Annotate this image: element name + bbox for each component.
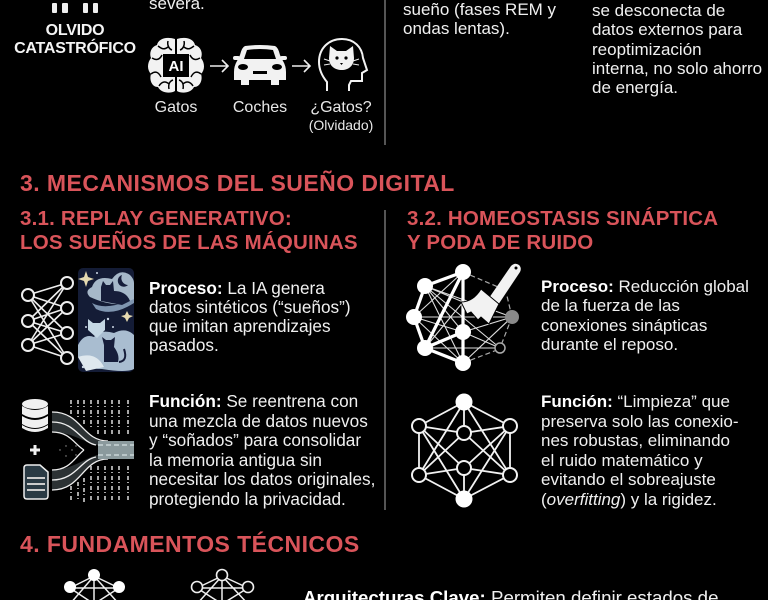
text: process 3.2: Proceso: Reducción global (541, 277, 749, 296)
text: function 3.2: el ruido matemático y (541, 450, 703, 470)
text: process 3.2 (541, 277, 749, 354)
text: process 3.2: durante el reposo. (541, 335, 678, 354)
image: dreaming cats (78, 268, 134, 372)
text: process 3.1: pasados. (149, 335, 219, 355)
text: function 3.2 (541, 392, 738, 508)
heading: 3.1 (20, 207, 358, 254)
text: disconnect: de energía. (592, 78, 678, 97)
divider: middle (384, 210, 386, 510)
label: catastrophic forgetting: CATASTRÓFICO (14, 40, 136, 57)
text: sleep phases (403, 0, 556, 38)
heading: 3.1: 3.1. REPLAY GENERATIVO: (20, 207, 292, 230)
text: function 3.1 (149, 391, 375, 509)
text: function 3.2: Función: “Limpieza” que (541, 392, 730, 411)
label: forgotten cats (309, 99, 373, 133)
label: forgotten cats: (Olvidado) (309, 117, 373, 133)
heading: 3.2: 3.2. HOMEOSTASIS SINÁPTICA (407, 207, 718, 230)
label: catastrophic forgetting: OLVIDO (46, 22, 104, 39)
label: Gatos: Gatos (155, 99, 197, 116)
heading: section 3: 3. MECANISMOS DEL SUEÑO DIGITAL (20, 170, 455, 196)
text: function 3.2: (overfitting) y la rigidez. (541, 490, 717, 508)
text: disconnect: datos externos para (592, 20, 742, 39)
text: process 3.1: que imitan aprendizajes (149, 316, 331, 336)
text: process 3.1: datos sintéticos (“sueños”) (149, 297, 351, 317)
icon: network with broom (406, 264, 521, 371)
heading: 3.2: Y PODA DE RUIDO (407, 231, 593, 254)
text: function 3.1: una mezcla de datos nuevos (149, 411, 368, 431)
heading: 3.2 (407, 207, 718, 254)
icon: database plus file (22, 399, 49, 500)
heading: 3.1: LOS SUEÑOS DE LAS MÁQUINAS (20, 231, 358, 254)
text: disconnect (592, 1, 762, 97)
icon: AI brain (148, 38, 204, 93)
text: process 3.1 (149, 278, 351, 355)
text: sleep phases: ondas lentas). (403, 19, 510, 38)
label: catastrophic forgetting (14, 22, 136, 57)
icon: AI brain: AI (168, 58, 184, 75)
icon: neural network (21, 276, 74, 365)
image: data streams merging (52, 400, 134, 502)
text: disconnect: se desconecta de (592, 1, 725, 20)
text: function 3.1: y “soñados” para consolidar (149, 430, 361, 450)
icon: filled network (64, 569, 125, 600)
text: function 3.1: la memoria antigua sin (149, 450, 322, 470)
label: Coches: Coches (233, 99, 287, 116)
text: sleep phases: sueño (fases REM y (403, 0, 556, 19)
text: function 3.1: necesitar los datos originales, (149, 469, 375, 489)
label: forgotten cats: ¿Gatos? (310, 99, 372, 116)
icon: forgetting bars (52, 3, 98, 13)
text: function 3.1: protegiendo la privacidad. (149, 489, 346, 509)
text: disconnect: reoptimización (592, 40, 702, 59)
heading: section 4: 4. FUNDAMENTOS TÉCNICOS (20, 531, 360, 557)
text: disconnect: interna, no solo ahorro (592, 59, 762, 78)
divider: top (384, 0, 386, 145)
arrow: car to head (292, 59, 311, 73)
text: process 3.2: de la fuerza de las (541, 296, 680, 315)
text: process 3.2: conexiones sinápticas (541, 316, 707, 335)
icon: head with cat (318, 38, 368, 91)
text: function 3.2: evitando el sobreajuste (541, 470, 716, 489)
icon: car (233, 45, 287, 85)
arrow: brain to car (210, 59, 229, 73)
text: function 3.1: Función: Se reentrena con (149, 391, 358, 411)
text: function 3.2: nes robustas, eliminando (541, 431, 730, 450)
text: process 3.1: Proceso: La IA genera (149, 278, 325, 298)
icon: outline network (190, 568, 254, 600)
icon: clean network (411, 394, 518, 508)
text: function 3.2: preserva solo las conexio- (541, 412, 738, 430)
